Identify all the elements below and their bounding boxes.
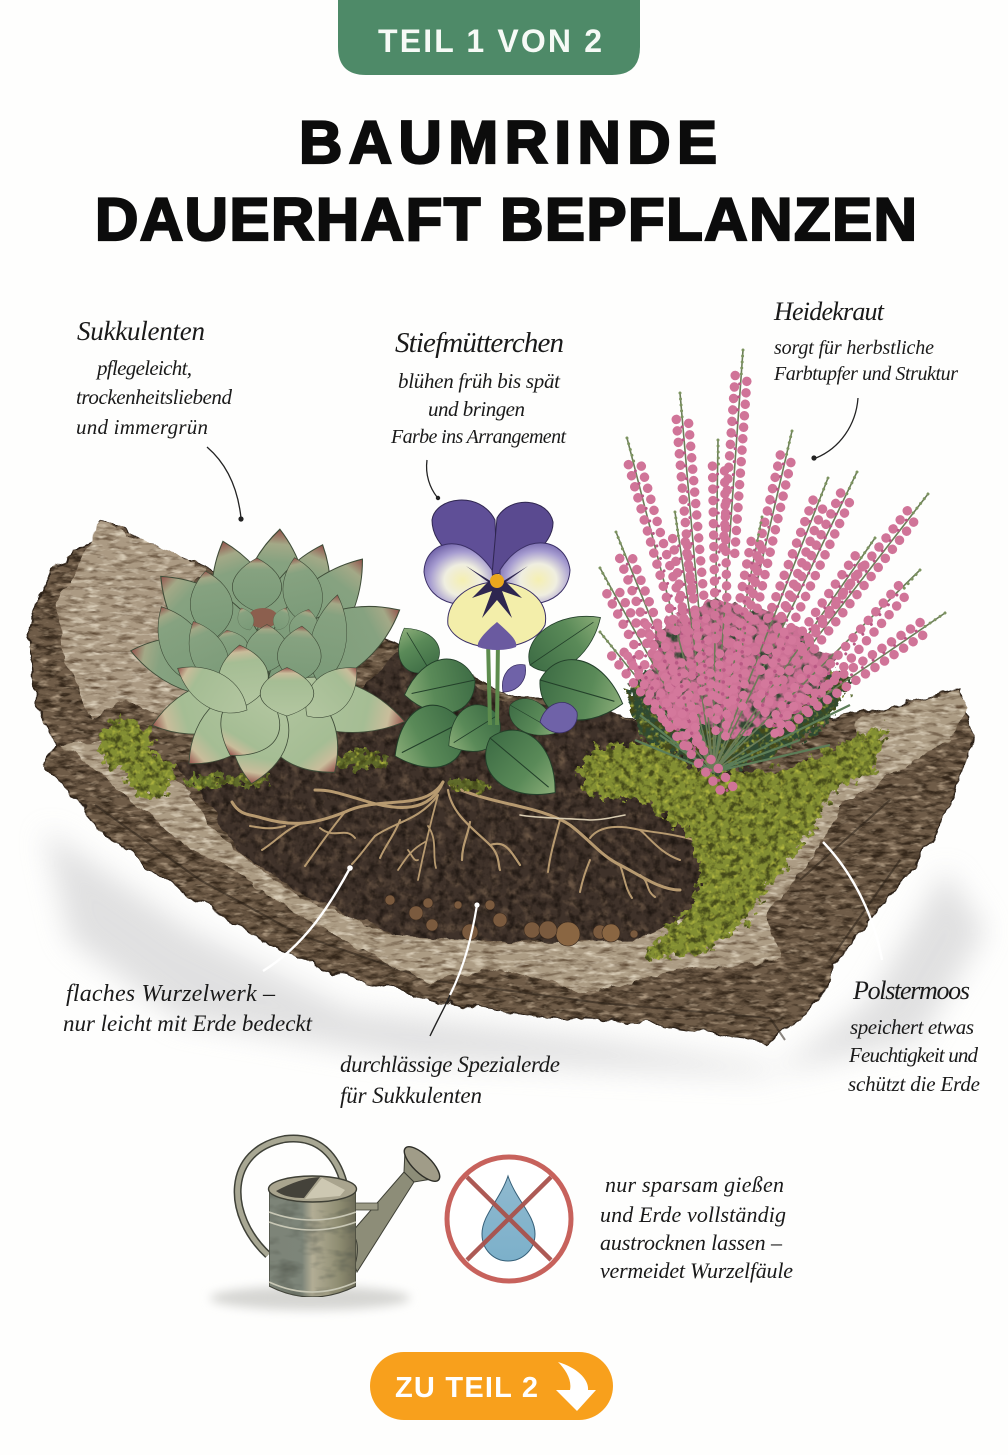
heather needles xyxy=(635,700,850,772)
title: DAUERHAFT BEPFLANZEN xyxy=(95,186,917,253)
arrow: Spezialerde xyxy=(430,902,480,1036)
can shadow xyxy=(210,1286,410,1310)
arrow: Sukkulenten xyxy=(207,447,244,522)
annotation: Polstermoos: Feuchtigkeit und xyxy=(848,1043,978,1067)
can body xyxy=(269,1190,356,1297)
annotation: Spezialerde: für Sukkulenten xyxy=(340,1083,482,1108)
illustration: planted bark xyxy=(28,521,985,1075)
annotation: watering advice: und Erde vollständig xyxy=(600,1202,786,1227)
arrow: Heidekraut xyxy=(811,398,858,461)
annotation: Heidekraut xyxy=(773,297,958,385)
light bark flakes xyxy=(57,521,967,993)
annotation: Polstermoos: speichert etwas xyxy=(850,1015,974,1039)
annotation: Sukkulenten: trockenheitsliebend xyxy=(76,385,232,409)
pansy top petals xyxy=(432,500,497,575)
annotation: Heidekraut: Heidekraut xyxy=(773,297,885,326)
icon: watering can xyxy=(210,1138,445,1310)
upper mid petals xyxy=(143,553,329,695)
can handle xyxy=(238,1138,345,1255)
arrow: Wurzelwerk xyxy=(263,865,353,971)
plant: heather xyxy=(595,350,948,799)
annotation: watering advice xyxy=(600,1172,793,1283)
soil xyxy=(175,650,790,942)
pebbles xyxy=(385,895,638,946)
heather long spikes xyxy=(595,350,948,799)
icon: no water xyxy=(447,1157,571,1281)
dark rosette base xyxy=(178,575,358,735)
annotation: Wurzelwerk: flaches Wurzelwerk – xyxy=(66,981,276,1007)
annotation: Polstermoos: Polstermoos xyxy=(852,976,970,1005)
header tab: part 1 of 2: TEIL 1 VON 2 xyxy=(378,23,602,59)
pansy stem xyxy=(488,640,498,725)
plant: succulent xyxy=(125,527,414,793)
annotation: Spezialerde xyxy=(340,1052,560,1108)
annotation: watering advice: vermeidet Wurzelfäule xyxy=(600,1258,793,1283)
pansy side petals xyxy=(424,544,494,604)
arrow: Stiefmütterchen xyxy=(427,460,440,500)
front petals xyxy=(168,592,370,730)
moss: left xyxy=(99,719,225,797)
rim band xyxy=(60,690,967,993)
heather dense spikes xyxy=(628,614,822,744)
pansy buds xyxy=(502,665,577,733)
can rose xyxy=(404,1150,438,1182)
annotation: Stiefmütterchen: Farbe ins Arrangement xyxy=(390,426,566,448)
annotation: Sukkulenten: Sukkulenten xyxy=(77,316,205,346)
annotation: Stiefmütterchen: blühen früh bis spät xyxy=(398,369,561,393)
annotation: Wurzelwerk xyxy=(63,981,313,1036)
outer petals xyxy=(125,527,414,793)
bark strata cracks xyxy=(95,800,900,1040)
button: to part 2 xyxy=(370,1352,613,1420)
annotation: Sukkulenten xyxy=(76,316,232,439)
heather flower mass xyxy=(640,600,840,735)
annotation: Sukkulenten: und immergrün xyxy=(76,415,208,439)
title xyxy=(95,109,917,253)
arrow: Polstermoos xyxy=(823,842,882,960)
annotation: Wurzelwerk: nur leicht mit Erde bedeckt xyxy=(63,1011,313,1036)
moss: right xyxy=(575,725,885,958)
annotation: Sukkulenten: pflegeleicht, xyxy=(95,356,192,380)
annotation: watering advice: nur sparsam gießen xyxy=(605,1172,784,1197)
annotation: Stiefmütterchen: und bringen xyxy=(428,397,525,421)
annotation: watering advice: austrocknen lassen – xyxy=(600,1230,783,1255)
header tab: part 1 of 2 xyxy=(338,0,640,75)
annotation: Stiefmütterchen xyxy=(390,327,566,448)
button: to part 2: ZU TEIL 2 xyxy=(395,1372,538,1404)
heather foliage xyxy=(625,640,855,775)
annotation: Stiefmütterchen: Stiefmütterchen xyxy=(395,327,564,359)
upper left flake xyxy=(57,521,207,721)
annotation: Polstermoos xyxy=(848,976,980,1096)
pansy face xyxy=(466,566,528,618)
ground shadow xyxy=(45,830,985,1075)
roots xyxy=(232,782,700,898)
annotation: Heidekraut: Farbtupfer und Struktur xyxy=(773,363,958,385)
annotation: Heidekraut: sorgt für herbstliche xyxy=(774,337,934,359)
icon: curved arrow xyxy=(556,1362,596,1411)
annotation: Spezialerde: durchlässige Spezialerde xyxy=(340,1052,560,1077)
can spout xyxy=(345,1172,414,1272)
pansy lower petal xyxy=(448,582,546,648)
heather stems xyxy=(600,350,945,772)
pansy leaves xyxy=(381,600,631,814)
title: BAUMRINDE xyxy=(299,109,717,176)
plant: pansy xyxy=(381,500,631,814)
bark body xyxy=(28,521,973,1043)
moss under plants xyxy=(210,751,490,791)
annotation: Polstermoos: schützt die Erde xyxy=(848,1072,980,1096)
